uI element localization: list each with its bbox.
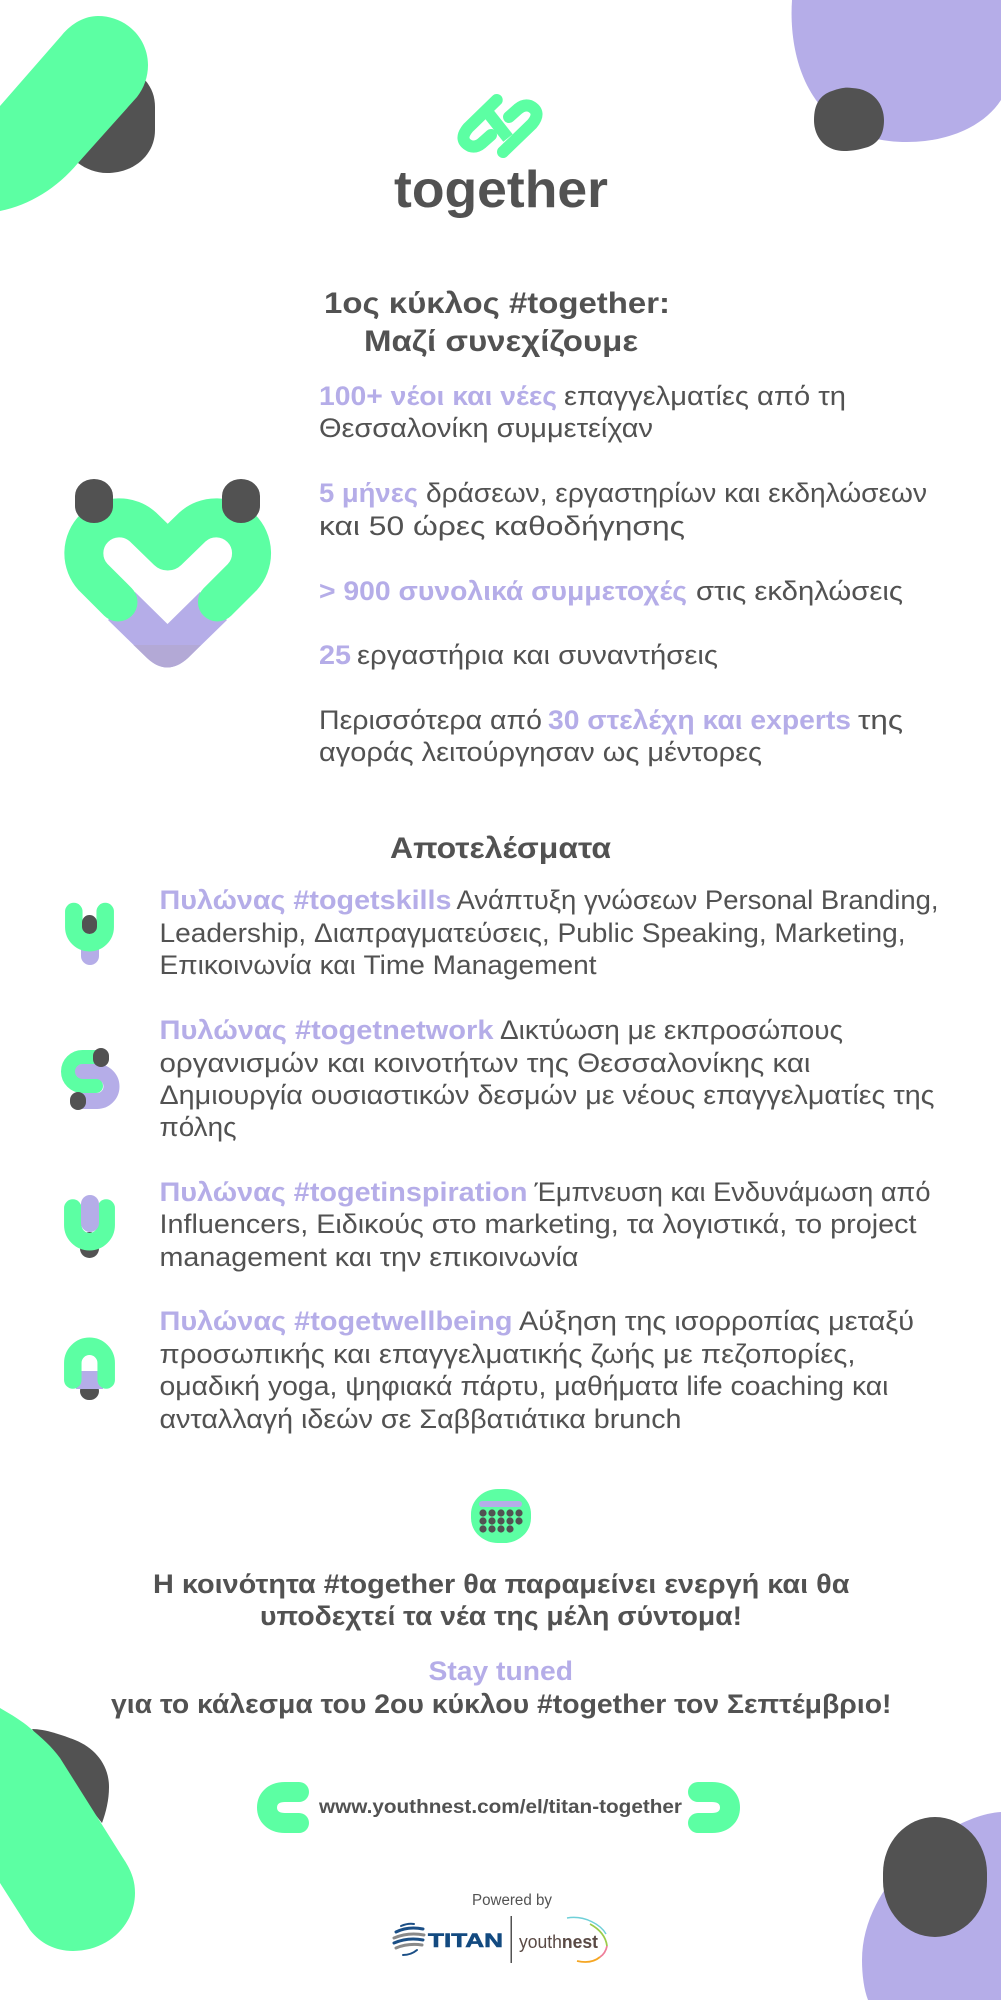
- text: togetnetwork: Πυλώνας #togetnetwork: [160, 1015, 494, 1045]
- text: togetwellbeing: Αύξηση της ισορροπίας μεταξύ: [519, 1306, 914, 1336]
- fact: workshops: εργαστήρια και συναντήσεις: [357, 640, 718, 670]
- sponsor logos: [394, 1916, 607, 1963]
- url text: www.youthnest.com/el/titan-together: [318, 1797, 683, 1818]
- fact: mentors: της: [858, 705, 903, 735]
- text block: stay tuned: για το κάλεσμα του 2ου κύκλου #together τον Σεπτέμβριο!: [111, 1689, 892, 1719]
- text: togetskills: Leadership, Διαπραγματεύσεις, Public Speaking, Marketing,: [160, 918, 906, 948]
- text block: stay tuned: Stay tuned: [428, 1656, 573, 1686]
- fact: participants: [319, 381, 846, 443]
- icon: linked chain: [463, 100, 537, 152]
- pillar: togetinspiration: [73, 1177, 931, 1272]
- icon: S figure: [68, 1048, 112, 1110]
- text: togetwellbeing: [160, 1306, 914, 1434]
- text block: community message: Η κοινότητα #together θα παραμείνει ενεργή και θα: [153, 1569, 850, 1599]
- link: website: [267, 1792, 730, 1823]
- decoration: bottom right blobs: [862, 1812, 1001, 2000]
- text: togetnetwork: οργανισμών και κοινοτήτων της Θεσσαλονίκης και: [160, 1048, 811, 1078]
- text block: stay tuned: [111, 1656, 892, 1719]
- icon: heart with two figures: [75, 479, 260, 668]
- pillar: togetskills: [74, 885, 939, 980]
- text: togetnetwork: [160, 1015, 934, 1142]
- heading: results: Αποτελέσματα: [390, 832, 612, 865]
- title: [324, 287, 670, 358]
- logo: titan: [394, 1924, 503, 1955]
- text: togetwellbeing: προσωπικής και επαγγελματικής ζωής με πεζοπορίες,: [160, 1339, 855, 1369]
- text: togetskills: [160, 885, 938, 980]
- icon: right bracket: [698, 1792, 730, 1823]
- text: togetinspiration: Influencers, Ειδικούς στο marketing, τα λογιστικά, το project: [160, 1209, 917, 1239]
- text block: community message: υποδεχτεί τα νέα της μέλη σύντομα!: [260, 1601, 742, 1631]
- fact: duration: 5 μήνες: [319, 478, 418, 508]
- fact: duration: [319, 478, 927, 541]
- fact: attendances: στις εκδηλώσεις: [696, 576, 903, 606]
- text: togetnetwork: πόλης: [160, 1112, 236, 1142]
- pillar: togetnetwork: [68, 1015, 934, 1142]
- fact: workshops: 25: [319, 640, 351, 670]
- fact: attendances: > 900 συνολικά συμμετοχές: [319, 576, 687, 606]
- icon: calendar: [471, 1489, 531, 1543]
- fact: participants: Θεσσαλονίκη συμμετείχαν: [319, 413, 653, 443]
- icon: Y figure: [74, 912, 105, 965]
- fact: mentors: Περισσότερα από: [319, 705, 542, 735]
- fact: mentors: 30 στελέχη και experts: [548, 705, 851, 735]
- text: togetnetwork: Δικτύωση με εκπροσώπους: [500, 1015, 843, 1045]
- logo: titan: TITAN: [428, 1931, 503, 1952]
- title: 1ος κύκλος #together:: [324, 287, 670, 320]
- text: togetskills: Ανάπτυξη γνώσεων Personal Branding,: [456, 885, 938, 915]
- icon: A figure: [73, 1346, 106, 1400]
- powered by label: Powered by: [472, 1892, 552, 1909]
- text: togetnetwork: Δημιουργία ουσιαστικών δεσμών με νέους επαγγελματίες της: [160, 1080, 934, 1110]
- decoration: bottom left blobs: [0, 1708, 135, 1951]
- logo: youthnest: youthnest: [519, 1932, 598, 1952]
- fact: duration: και 50 ώρες καθοδήγησης: [319, 511, 685, 541]
- icon: left bracket: [267, 1792, 299, 1823]
- logo: youthnest: [519, 1917, 607, 1962]
- text: togetwellbeing: ομαδική yoga, ψηφιακά πάρτυ, μαθήματα life coaching και: [160, 1371, 889, 1401]
- fact: participants: 100+ νέοι και νέες: [319, 381, 557, 411]
- text: togetinspiration: Πυλώνας #togetinspiration: [160, 1177, 528, 1207]
- text: togetinspiration: [160, 1177, 930, 1272]
- fact: attendances: [319, 576, 903, 606]
- icon: U figure: [73, 1195, 106, 1258]
- fact: duration: δράσεων, εργαστηρίων και εκδηλώσεων: [426, 478, 927, 508]
- logo wordmark: together: [394, 161, 608, 219]
- text: togetwellbeing: Πυλώνας #togetwellbeing: [160, 1306, 512, 1336]
- fact: participants: επαγγελματίες από τη: [564, 381, 846, 411]
- fact: mentors: [319, 705, 903, 767]
- text block: key facts: [319, 381, 927, 767]
- decoration: top left blobs: [0, 16, 155, 211]
- divider: [510, 1916, 512, 1963]
- text: togetwellbeing: ανταλλαγή ιδεών σε Σαββατιάτικα brunch: [160, 1404, 682, 1434]
- title: Μαζί συνεχίζουμε: [364, 325, 638, 358]
- fact: mentors: αγοράς λειτούργησαν ως μέντορες: [319, 737, 762, 767]
- text: togetskills: Επικοινωνία και Time Management: [160, 950, 597, 980]
- text: togetskills: Πυλώνας #togetskills: [160, 885, 452, 915]
- decoration: top right blobs: [792, 0, 1001, 151]
- text: togetinspiration: management και την επικοινωνία: [160, 1242, 578, 1272]
- text: togetinspiration: Έμπνευση και Ενδυνάμωση από: [533, 1177, 930, 1207]
- text block: community message: [153, 1569, 850, 1631]
- pillar: togetwellbeing: [73, 1306, 914, 1434]
- logo: together: [394, 100, 608, 219]
